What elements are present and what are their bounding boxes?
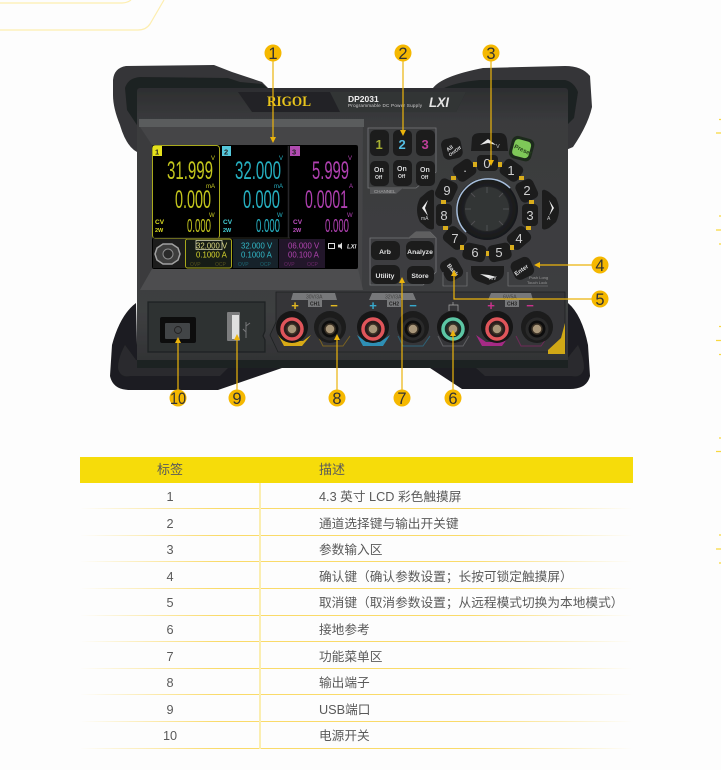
parameter keypad: 3	[526, 208, 534, 223]
callout 2: channel keys: 2	[398, 45, 408, 63]
row 8: 8	[166, 676, 174, 690]
binding posts	[276, 311, 553, 343]
column divider	[259, 483, 261, 749]
Back, down and Enter keys: mV	[489, 276, 497, 282]
channel 1 readout: CV	[155, 219, 165, 226]
row 1	[80, 483, 633, 510]
row 4: 4	[166, 570, 174, 584]
callout 8: output terminals: 8	[332, 390, 342, 408]
Back, down and Enter keys	[438, 255, 548, 286]
row 7: 功能菜单区	[319, 650, 382, 664]
parameter keypad: 4	[515, 231, 523, 246]
top and side keys: V	[496, 144, 500, 150]
channel 1 settings: 32.000 V	[196, 242, 228, 250]
channel tags: +	[369, 298, 377, 313]
callout 4: Enter key: 4	[595, 257, 605, 275]
row 10: 10	[163, 729, 177, 743]
channel 1 settings	[186, 239, 232, 268]
LXI logo: LXI	[429, 94, 450, 110]
row 4	[80, 563, 633, 589]
callout 9: USB	[228, 334, 246, 408]
channel 3 settings: 00.100 A	[288, 250, 320, 260]
table: label descriptions	[80, 457, 633, 749]
channel keys: On	[397, 166, 407, 173]
Back, down and Enter keys: Back	[445, 263, 459, 278]
terminal colour bases	[278, 335, 548, 346]
channel tags: 30V/3A	[306, 294, 323, 300]
channel tags: −	[526, 298, 534, 313]
callout 10: power switch: 10	[170, 390, 186, 408]
row 2: 2	[166, 517, 174, 531]
channel keys: On	[420, 167, 430, 174]
callout 9: USB: 9	[232, 390, 242, 408]
channel 2 readout: W	[277, 213, 283, 219]
channel 2 readout: 2	[224, 148, 228, 156]
Back, down and Enter keys: Touch Lock	[527, 280, 547, 285]
channel 1 readout: V	[211, 156, 215, 162]
top and side keys: On/Off	[448, 145, 462, 157]
channel keys: Off	[375, 175, 383, 181]
output terminals	[270, 292, 565, 354]
callout 7: menu keys	[394, 277, 410, 408]
power switch	[160, 317, 196, 343]
row 5: 取消键（取消参数设置；从远程模式切换为本地模式）	[319, 596, 624, 610]
callout 1: LCD	[264, 44, 282, 143]
logo RIGOL: RIGOL	[267, 94, 311, 110]
callout 4: Enter key	[534, 256, 608, 275]
status icons: LXI	[347, 244, 357, 250]
row 2: 通道选择键与输出开关键	[319, 517, 459, 531]
row 9: 9	[166, 703, 174, 717]
channel 2 readout: mA	[274, 184, 283, 190]
channel 2 settings: OCP	[260, 262, 272, 268]
channel tags: −	[409, 298, 417, 313]
channel 1 readout: 1	[155, 148, 159, 156]
top-left bumper	[113, 65, 270, 152]
channel keys: 1	[376, 137, 383, 152]
status icons	[328, 242, 357, 250]
table header: 描述	[319, 462, 345, 477]
callout 5: Back key	[451, 270, 608, 309]
channel 3 readout	[290, 146, 353, 236]
top and side keys: mA	[421, 216, 429, 222]
channel 3 readout: 0.000	[325, 216, 349, 236]
row 2	[80, 510, 633, 536]
callout 3: parameter input: 3	[486, 45, 496, 63]
row 6: 6	[166, 623, 174, 637]
row 3	[80, 536, 633, 563]
function menu keys: Utility	[376, 273, 395, 280]
channel tags: +	[291, 298, 299, 313]
parameter keypad: 6	[471, 245, 479, 260]
channel 3 settings: 06.000 V	[288, 242, 320, 250]
channel tags: 6V/5A	[503, 294, 517, 300]
callout 1: LCD: 1	[268, 45, 278, 63]
parameter keypad: 7	[451, 231, 459, 246]
callout 6: ground terminal: 6	[448, 390, 458, 408]
rotary knob	[456, 178, 518, 240]
parameter keypad: 0	[483, 156, 491, 171]
channel 3 readout: CV	[293, 219, 303, 226]
row 9	[80, 696, 633, 722]
channel 1 settings: OCP	[215, 262, 226, 268]
parameter keypad: 9	[443, 183, 451, 198]
channel 2 readout: 0.000	[256, 216, 280, 236]
channel 1 readout: mA	[206, 184, 215, 190]
parameter keypad: 5	[495, 245, 503, 260]
settings gear icon	[153, 239, 185, 268]
channel 2 readout	[222, 146, 283, 236]
channel tags: CH1	[310, 302, 320, 308]
channel 1 readout: 2W	[155, 228, 164, 234]
Back, down and Enter keys: Enter	[514, 264, 530, 278]
channel 3 readout: A	[349, 184, 353, 190]
channel 3 readout: 2W	[293, 228, 302, 234]
parameter keypad	[370, 133, 559, 286]
parameter keypad: .	[463, 160, 467, 175]
model name: DP2031	[348, 94, 379, 104]
row 3: 参数输入区	[319, 543, 382, 557]
channel 3 readout: 5.999	[312, 157, 349, 185]
function menu keys	[370, 232, 436, 285]
channel 2 readout: 2W	[223, 228, 232, 234]
function menu keys: Arb	[379, 249, 391, 256]
row 8	[80, 669, 633, 696]
channel tags: CH3	[507, 302, 517, 308]
channel 3 readout: 3	[292, 148, 296, 156]
table header	[80, 457, 633, 483]
row 5: 5	[166, 596, 174, 610]
bottom-left bumper	[110, 303, 282, 390]
channel 3 readout: 0.0001	[305, 186, 348, 214]
channel 1 readout: 31.999	[167, 157, 213, 185]
Back, down and Enter keys: Push Long	[529, 275, 548, 280]
channel tags: CH2	[389, 302, 399, 308]
row 1: 4.3 英寸 LCD 彩色触摸屏	[319, 490, 461, 504]
callout 8: output terminals	[328, 334, 346, 408]
channel tags: +	[487, 298, 495, 313]
model subtitle: Programmable DC Power Supply	[348, 103, 423, 108]
callout 7: menu keys: 7	[397, 390, 407, 408]
callout 10: power switch	[170, 337, 186, 408]
parameter keypad: 8	[440, 208, 448, 223]
channel keys: 3	[422, 137, 429, 152]
top and side keys: Preset	[513, 144, 532, 157]
channel tags: −	[330, 298, 338, 313]
channel keys: 2	[398, 137, 406, 152]
channel keys: On	[374, 167, 384, 174]
row 5	[80, 589, 633, 616]
channel tags: 32V/3A	[385, 294, 402, 300]
row 9: USB端口	[319, 703, 370, 717]
channel keys: Off	[421, 175, 429, 181]
channel 2 readout: 0.000	[243, 186, 280, 214]
channel 3 settings: OVP	[284, 262, 295, 268]
channel 2 settings: 32.000 V	[241, 242, 273, 250]
device: DP2031 power supply front panel	[110, 65, 592, 390]
LCD screen	[152, 145, 358, 269]
channel 2 settings: 0.1000 A	[241, 250, 273, 260]
parameter keypad: 2	[523, 183, 531, 198]
channel 1 settings: OVP	[190, 262, 201, 268]
channel 1 readout	[152, 146, 220, 238]
top-right bumper	[433, 66, 592, 150]
channel 2 settings	[233, 239, 278, 268]
body	[137, 88, 568, 368]
row 10: 电源开关	[319, 729, 370, 743]
channel 3 settings	[279, 239, 325, 268]
channel 3 settings: OCP	[307, 262, 318, 268]
channel 2 readout: V	[279, 156, 283, 162]
header band	[238, 92, 466, 112]
table header: 标签	[157, 462, 183, 477]
function menu keys: Analyze	[407, 249, 433, 256]
channel keys	[368, 128, 436, 194]
row 4: 确认键（确认参数设置；长按可锁定触摸屏）	[319, 570, 573, 584]
channel 1 readout: W	[209, 213, 215, 219]
row 8: 输出端子	[319, 676, 370, 690]
row 1: 1	[166, 490, 174, 504]
row 6	[80, 616, 633, 643]
channel tags	[291, 293, 534, 313]
channel 2 readout: 32.000	[235, 157, 281, 185]
bottom-right bumper	[430, 303, 590, 389]
function menu keys: Store	[411, 273, 429, 280]
channel keys: Off	[398, 174, 406, 180]
row 10	[80, 722, 633, 749]
USB port	[227, 312, 250, 341]
screen bezel	[140, 119, 363, 290]
channel 2 readout: CV	[223, 219, 233, 226]
channel keys: CHANNEL	[374, 189, 396, 194]
channel 2 settings: OVP	[238, 262, 249, 268]
channel dividers	[288, 146, 290, 238]
channel 3 readout: V	[348, 156, 352, 162]
row 3: 3	[166, 543, 174, 557]
row 7	[80, 643, 633, 669]
channel 1 settings: 0.1000 A	[196, 250, 228, 260]
top and side keys: A	[547, 216, 551, 222]
callout 2: channel keys	[394, 44, 412, 136]
channel 3 readout: W	[347, 213, 353, 219]
yellow separators between number keys	[441, 162, 534, 256]
row 7: 7	[166, 650, 174, 664]
callout 6: ground terminal	[444, 330, 462, 408]
top and side keys: All	[446, 144, 455, 154]
channel 1 readout: 0.000	[187, 216, 211, 236]
channel 1 readout: 0.000	[175, 186, 211, 214]
callout 3: parameter input	[482, 44, 500, 166]
warning label	[548, 323, 565, 354]
callout 5: Back key: 5	[595, 291, 605, 309]
row 6: 接地参考	[319, 623, 370, 637]
top and side keys	[417, 133, 559, 230]
number keys	[433, 155, 540, 263]
power and USB panel	[148, 302, 265, 352]
parameter keypad: 1	[507, 163, 515, 178]
